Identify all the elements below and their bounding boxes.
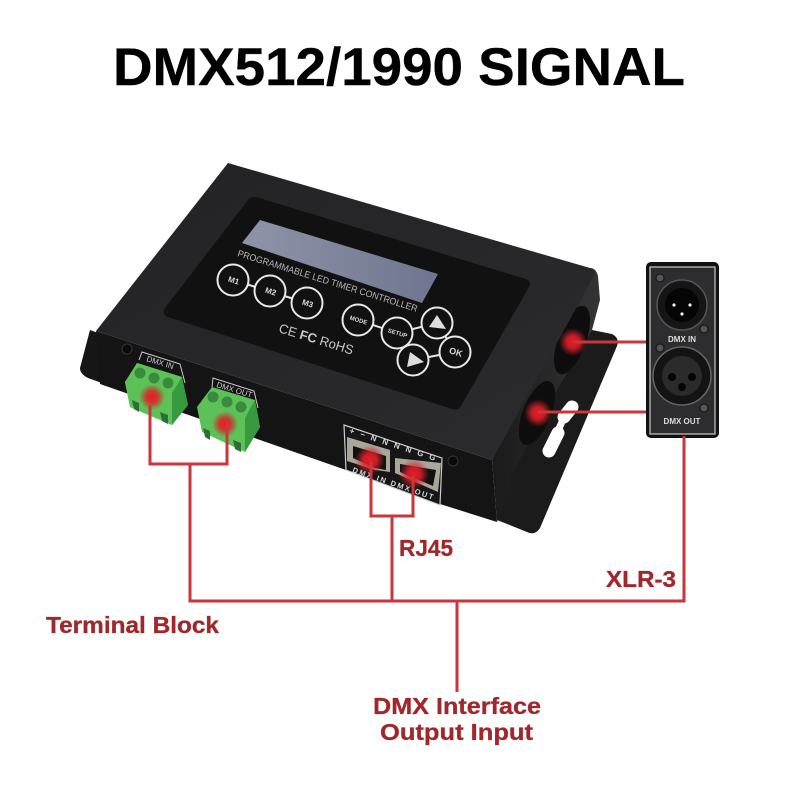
label RJ45: RJ45 (399, 535, 453, 561)
RJ45 jack OUT (395, 458, 441, 492)
side face (492, 268, 600, 522)
button M3 (292, 288, 322, 318)
label Output Input: Output Input (380, 719, 533, 745)
RJ45 panel (344, 425, 442, 505)
certification marks: CE FC RoHS (277, 321, 356, 358)
label Terminal Block: Terminal Block (46, 612, 219, 638)
button M1: M1 (227, 275, 241, 287)
screws (122, 344, 458, 466)
controller device (80, 163, 618, 533)
connector wiring (150, 342, 684, 692)
RJ45 jack IN (347, 437, 390, 472)
terminal block label IN (139, 352, 185, 383)
button M2 (254, 276, 286, 306)
panel screws (656, 274, 708, 412)
button MODE: MODE (349, 316, 368, 327)
LCD screen (242, 220, 438, 303)
front face (96, 331, 497, 522)
top face (96, 163, 594, 460)
terminal block label OUT: DMX OUT (215, 380, 253, 400)
terminal block label OUT (212, 378, 258, 408)
green terminal block OUT (197, 387, 260, 452)
bottom XLR socket (511, 376, 563, 450)
flange slot (549, 407, 572, 451)
button M2: M2 (264, 286, 278, 298)
XLR male connector (657, 280, 707, 330)
button SETUP (382, 318, 412, 348)
XLR female connector (653, 347, 711, 405)
title: DMX512/1990 SIGNAL (113, 38, 685, 97)
green terminal block IN (125, 363, 188, 425)
left mounting flange (80, 330, 135, 395)
button down (398, 344, 428, 376)
button M3: M3 (301, 298, 315, 310)
XLR panel (646, 262, 719, 438)
label DMX Interface: DMX Interface (373, 693, 541, 719)
button OK: OK (448, 345, 464, 359)
button SETUP: SETUP (387, 328, 408, 340)
RJ45 bottom labels: DMX IN DMX OUT (351, 465, 435, 502)
top XLR socket (547, 301, 597, 379)
RJ45 pin labels: + − N N N N G G (348, 426, 437, 463)
control panel (164, 197, 530, 410)
panel heading: PROGRAMMABLE LED TIMER CONTROLLER (236, 247, 419, 314)
RJ45 jack openings (353, 446, 436, 486)
right mounting flange (497, 330, 618, 533)
button MODE (342, 304, 374, 336)
DMX IN label: DMX IN (668, 335, 696, 344)
button links (233, 280, 455, 360)
button up (422, 308, 452, 338)
label XLR-3: XLR-3 (606, 566, 676, 592)
button OK (440, 336, 470, 368)
terminal block label IN: DMX IN (145, 354, 175, 371)
red glow markers (139, 328, 587, 489)
DMX OUT label: DMX OUT (664, 417, 701, 426)
button M1 (218, 264, 248, 296)
